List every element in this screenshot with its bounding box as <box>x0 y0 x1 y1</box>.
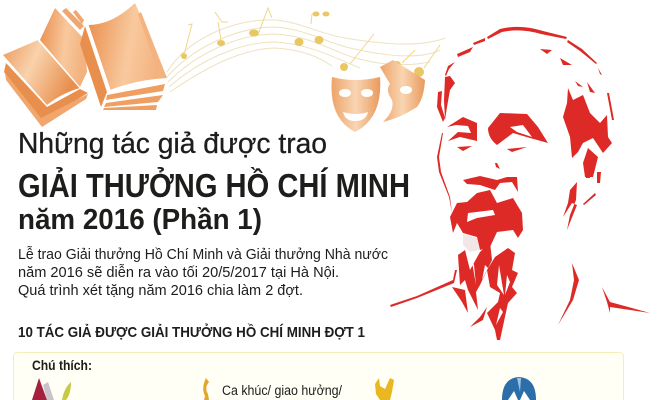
title: năm 2016 (Phần 1) <box>18 204 262 236</box>
icon: open books <box>3 3 167 127</box>
icon: opera mask <box>502 377 536 400</box>
intro paragraph: Quá trình xét tặng năm 2016 chia làm 2 đợt. <box>18 282 303 299</box>
intro paragraph <box>18 246 388 299</box>
legend title: Chú thích: <box>32 358 92 373</box>
music staff with notes <box>167 8 445 92</box>
intro paragraph: Lễ trao Giải thưởng Hồ Chí Minh và Giải thưởng Nhà nước <box>18 246 388 263</box>
title: Những tác giả được trao <box>18 128 327 160</box>
panel: legend <box>14 352 624 400</box>
section heading: 10 TÁC GIẢ ĐƯỢC GIẢI THƯỞNG HỒ CHÍ MINH ĐỢT 1 <box>18 323 365 341</box>
icon: theatre masks <box>331 60 425 132</box>
icon: gold music note <box>203 378 209 400</box>
title: GIẢI THƯỞNG HỒ CHÍ MINH <box>18 167 410 204</box>
intro paragraph: năm 2016 sẽ diễn ra vào tối 20/5/2017 tại Hà Nội. <box>18 264 339 281</box>
icon: literature book and quill <box>32 378 71 400</box>
icon: gold dancer <box>375 378 394 400</box>
title <box>18 128 410 236</box>
legend label: music: Ca khúc/ giao hưởng/ <box>222 383 342 398</box>
portrait: red stencil face <box>390 27 650 340</box>
